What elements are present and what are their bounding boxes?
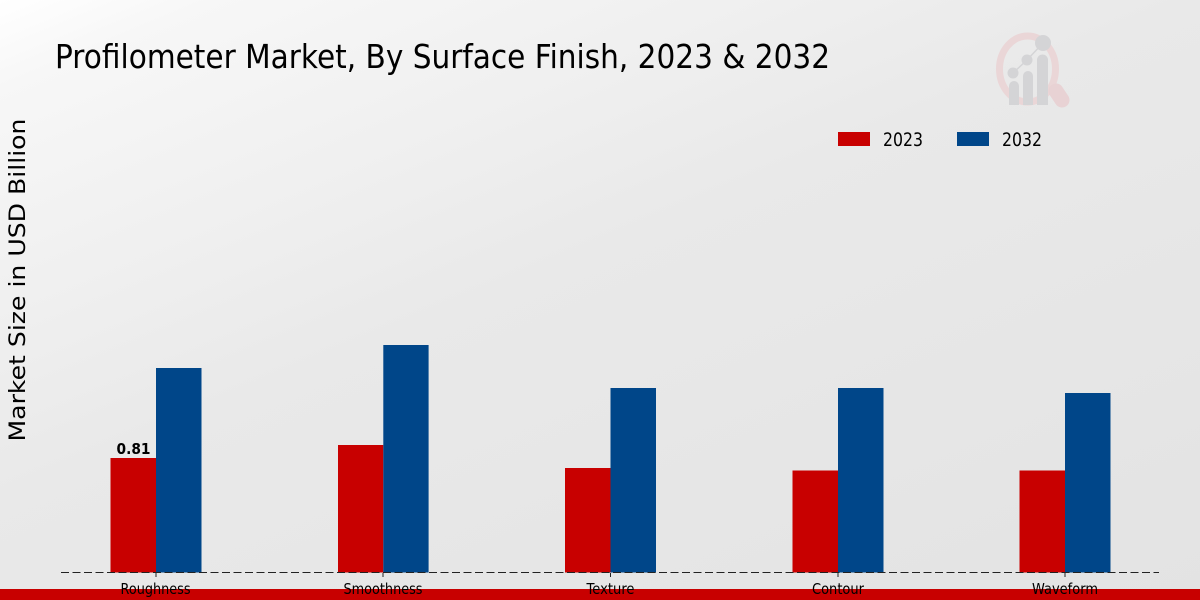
group: Smoothness [338, 345, 429, 572]
legend label 2032: 2032 [1002, 129, 1042, 151]
legend [838, 129, 1042, 151]
label: Waveform: Waveform [1032, 580, 1098, 598]
label: Contour: Contour [812, 580, 865, 598]
label: Roughness: Roughness [120, 580, 191, 598]
group: Contour [792, 388, 884, 572]
legend swatch 2023 [838, 132, 870, 146]
bar chart [110, 345, 1110, 572]
group: Waveform [1020, 393, 1110, 572]
bottom red band [0, 589, 1200, 600]
label: Smoothness: Smoothness [344, 580, 423, 598]
title: Profilometer Market, By Surface Finish, 2023 & 2032 [55, 37, 830, 76]
legend label 2023: 2023 [883, 129, 923, 151]
x axis labels [120, 580, 1098, 598]
legend swatch 2032 [957, 132, 989, 146]
x axis baseline [61, 572, 1159, 574]
group: Texture [565, 388, 656, 572]
value label: 0.81 [116, 440, 150, 458]
group: Roughness [110, 368, 202, 572]
icon: watermark logo [1000, 35, 1062, 105]
y axis title: Market Size in USD Billion [5, 118, 31, 442]
label: Texture: Texture [586, 580, 634, 598]
